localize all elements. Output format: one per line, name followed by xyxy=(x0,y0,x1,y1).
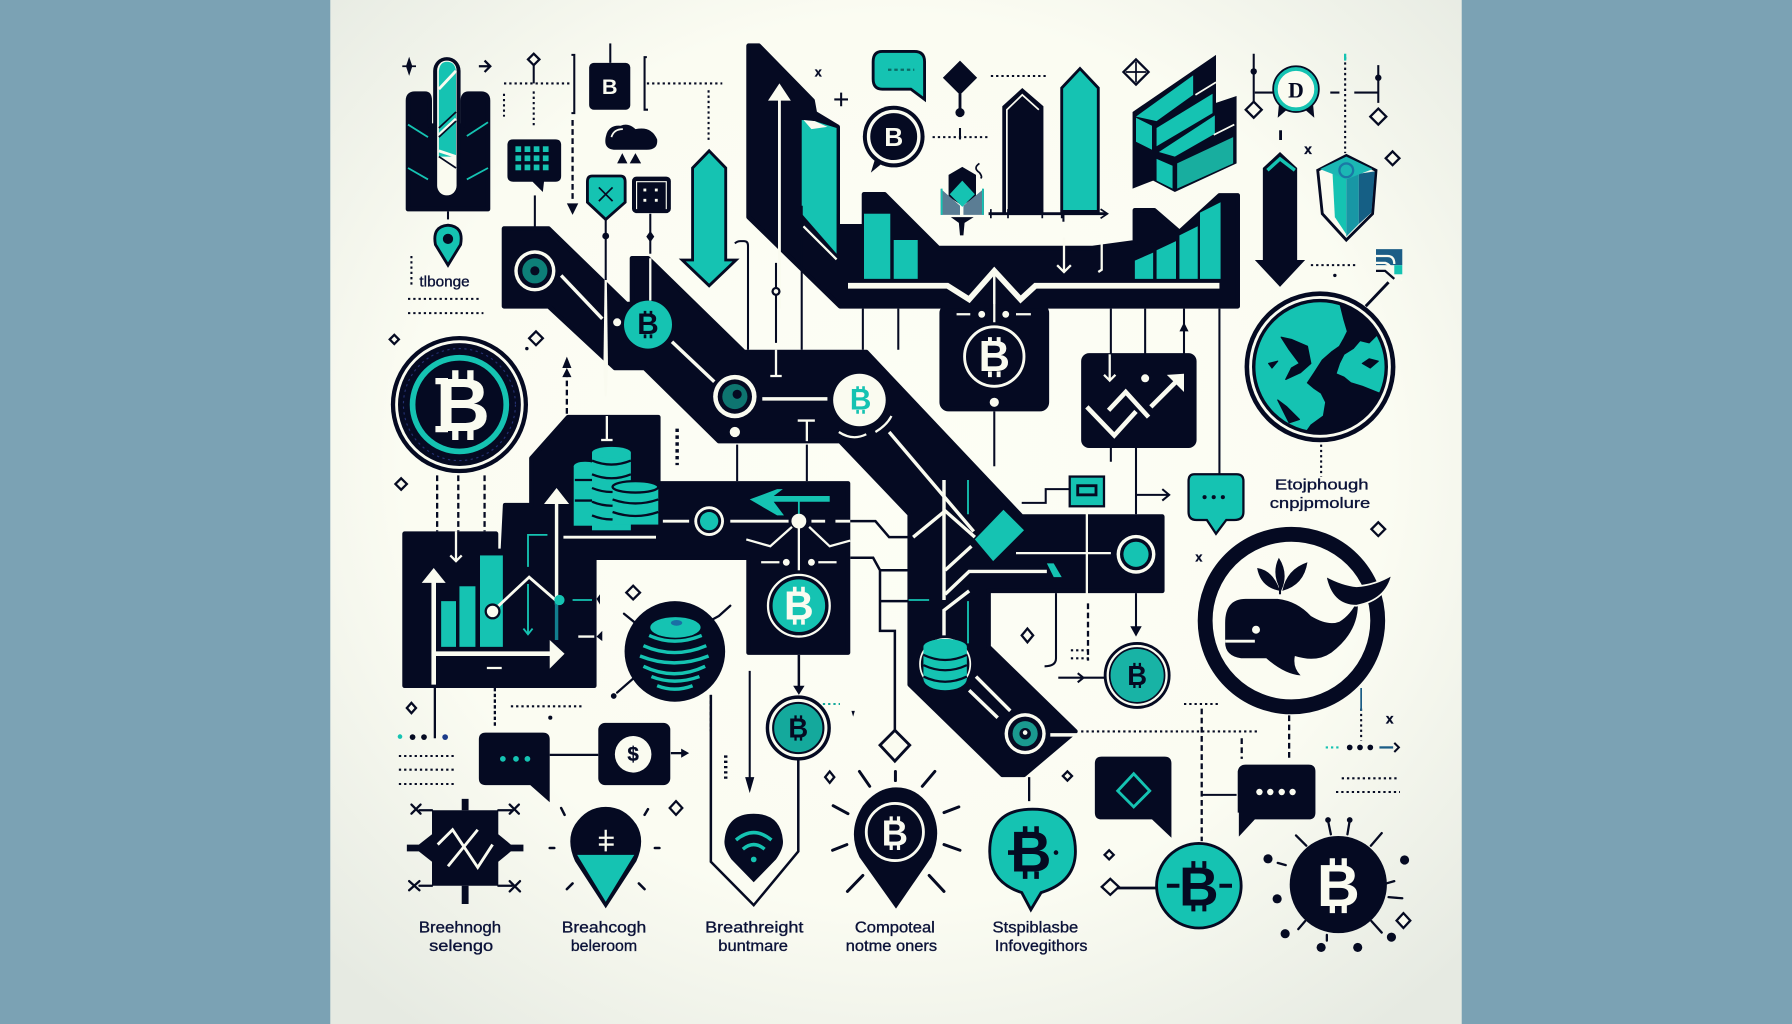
label: column 1: Breehnogh xyxy=(419,920,501,936)
bitcoin bubble: B xyxy=(884,122,903,152)
teal left arrow xyxy=(750,489,830,515)
coin right small: B xyxy=(1127,660,1147,691)
towers chart xyxy=(989,69,1107,222)
teal bars left xyxy=(802,120,918,279)
label: column 4 xyxy=(846,920,937,955)
dark pin bitcoin with rays xyxy=(825,771,960,909)
node: teal bitcoin xyxy=(624,301,672,349)
dark pin bitcoin with rays: B xyxy=(882,813,908,854)
label: globe caption: Etojphough xyxy=(1275,478,1369,494)
whale xyxy=(1225,599,1358,675)
D badge with connectors xyxy=(1246,54,1386,125)
big dark down arrow xyxy=(1255,152,1305,287)
label: column 1 xyxy=(419,920,501,955)
big teal down arrow xyxy=(682,151,736,286)
node: upper left ring xyxy=(514,250,555,291)
small teal square node xyxy=(1022,477,1104,506)
speech bubble diamond xyxy=(1095,757,1171,838)
small arrows on band xyxy=(1057,238,1102,272)
teal diamond xyxy=(975,510,1024,561)
box white bitcoin xyxy=(598,723,689,785)
crossing hex icon xyxy=(407,799,523,904)
small cross diamond xyxy=(1123,59,1149,85)
label: column 4: Compoteal xyxy=(855,920,935,936)
white junction lines xyxy=(913,480,1047,635)
node: lower right ring xyxy=(1005,713,1046,754)
big bitcoin coin xyxy=(391,336,528,473)
label: column 3: Breathreight xyxy=(705,920,804,936)
small diamonds and marks left: x xyxy=(815,66,822,80)
T marker xyxy=(798,421,815,441)
rising teal bars xyxy=(1135,202,1221,279)
small decorative marks top left xyxy=(402,59,490,73)
background panel xyxy=(330,0,1462,1024)
blue corner mark and leader xyxy=(1366,249,1402,306)
teal bubble top xyxy=(873,51,925,99)
label: column 2: beleroom xyxy=(571,938,637,955)
dark bitcoin sun: B xyxy=(1317,852,1360,919)
coin stacks xyxy=(574,447,658,530)
icon: cloud xyxy=(605,125,657,163)
teal pin bitcoin xyxy=(990,809,1075,910)
label: column 5 xyxy=(993,920,1088,955)
white zigzag baseline xyxy=(848,271,1219,299)
coin stack on band xyxy=(920,639,970,690)
teal bitcoin coin with diamond xyxy=(1102,843,1241,928)
coin right small xyxy=(1105,643,1169,707)
dashed links from big coin xyxy=(437,475,485,531)
coin below box xyxy=(767,655,829,759)
lower left block xyxy=(405,416,850,686)
thin connector lines xyxy=(562,241,782,465)
box white bitcoin: $ xyxy=(627,743,639,766)
teal pin bitcoin: B xyxy=(1010,821,1051,885)
node: right ring teal xyxy=(1117,535,1155,574)
teal bitcoin coin xyxy=(768,575,830,637)
round coin stack xyxy=(611,601,730,702)
icon: tube with fins xyxy=(408,57,488,209)
label: column 4: notme oners xyxy=(846,938,937,955)
label: globe caption xyxy=(1270,478,1370,512)
teal speech bubble xyxy=(1189,474,1243,534)
label: column 5: Infovegithors xyxy=(995,938,1088,955)
box: B tile: B xyxy=(602,74,618,99)
icon: location pin teal xyxy=(435,211,461,265)
label: tlbonge: tlbonge xyxy=(419,274,470,290)
black diamond pin xyxy=(943,61,977,117)
hex gem xyxy=(1318,155,1376,240)
label: column 5: Stspiblasbe xyxy=(993,920,1078,936)
whale badge xyxy=(1205,534,1392,707)
network band: upper diagonal to lower right xyxy=(504,229,1162,775)
dotted lines right lower: x xyxy=(1386,711,1394,726)
envelope gem icon xyxy=(941,163,984,235)
white up arrow xyxy=(768,83,791,309)
box: B tile xyxy=(589,63,630,110)
teal ring node xyxy=(694,506,724,536)
big bitcoin coin: B xyxy=(436,363,490,447)
dark bitcoin sun xyxy=(1263,817,1410,952)
box: bitcoin under band xyxy=(942,274,1047,409)
label: column 1: selengo xyxy=(429,938,493,955)
icon: teal shield x xyxy=(587,176,625,397)
label: column 3 xyxy=(705,920,804,955)
half teal pin xyxy=(550,801,682,906)
teal bitcoin coin: B xyxy=(784,583,814,629)
node: white bitcoin xyxy=(833,374,891,437)
links lower left xyxy=(398,586,640,784)
globe xyxy=(1245,291,1395,442)
small diamonds and marks left xyxy=(390,66,848,490)
label: column 3: buntmare xyxy=(718,938,788,955)
text: x xyxy=(1195,551,1202,565)
bitcoin bubble xyxy=(863,106,925,173)
outline diamond xyxy=(880,730,910,761)
text: x xyxy=(1304,142,1312,157)
node: teal bitcoin: B xyxy=(637,308,659,341)
box: trend arrow xyxy=(1083,354,1194,446)
dotted lines right lower xyxy=(1022,593,1400,841)
box: bitcoin under band: B xyxy=(979,333,1010,381)
teal bitcoin coin with diamond: B xyxy=(1179,855,1219,917)
label: column 2: Breahcogh xyxy=(562,920,646,936)
speech bubble dots xyxy=(1238,765,1315,837)
label: column 2 xyxy=(562,920,646,955)
coin below box: B xyxy=(788,712,808,743)
icon: chat grid xyxy=(507,139,561,227)
label: globe caption: cnpjpmolure xyxy=(1270,496,1370,512)
chat bubble three dots xyxy=(479,733,550,802)
node: middle ring xyxy=(713,375,757,418)
connector grid: top left xyxy=(504,43,722,215)
icon: dark square dots xyxy=(632,177,671,301)
wifi pin inside chevron xyxy=(711,695,798,905)
node: white bitcoin: B xyxy=(850,384,871,416)
connector lines around trend box xyxy=(737,206,1219,514)
bar chart xyxy=(422,488,594,685)
stacked 3d blocks xyxy=(1133,55,1237,192)
top band with bars xyxy=(749,46,1238,322)
diamond link xyxy=(850,521,909,730)
D badge with connectors: D xyxy=(1288,78,1304,102)
